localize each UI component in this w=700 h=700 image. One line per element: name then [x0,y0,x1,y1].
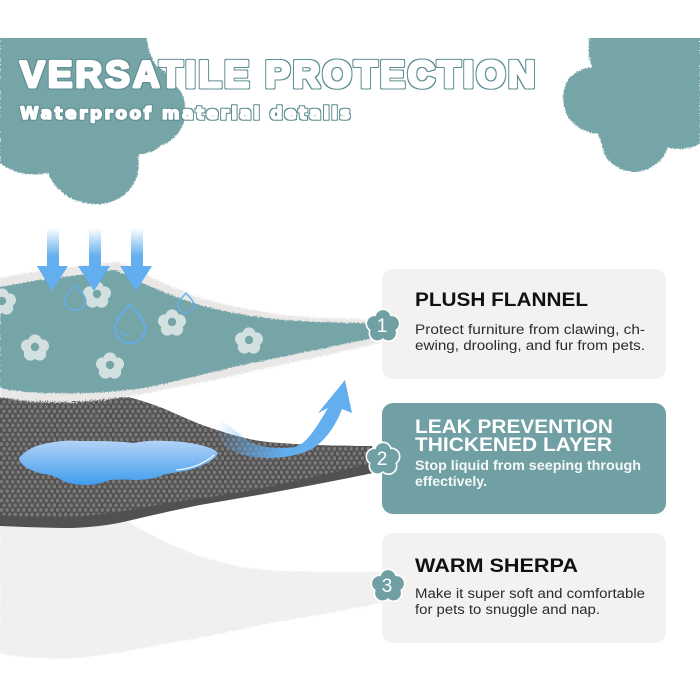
water puddle [19,441,218,485]
description: Protect furniture from clawing, ch- [415,322,645,337]
water drop outlines [65,284,194,343]
badge 3 [370,568,406,602]
heading [415,417,613,456]
description: Stop liquid from seeping through [415,458,641,473]
panel: plush flannel [382,269,666,379]
arrows: water pressing down [37,228,152,291]
title: VERSATILE PROTECTION [20,54,535,95]
badge 2 [366,442,400,475]
badge 1 [366,308,400,342]
description: ewing, drooling, and fur from pets. [415,338,645,353]
heading: THICKENED LAYER [415,435,612,456]
flannel flower prints [0,281,263,379]
heading: WARM SHERPA [415,556,578,577]
teal fabric [0,270,378,393]
background cloud: top left [0,30,185,204]
layer 2: leak prevention layer [0,397,378,528]
panel: warm sherpa [382,533,666,643]
description [415,322,645,353]
panel: leak prevention [382,403,666,514]
badge 3: 3 [382,576,392,597]
description: Make it super soft and comfortable [415,586,645,601]
layer 3: warm sherpa [0,515,384,659]
heading: PLUSH FLANNEL [415,290,588,311]
description: for pets to snuggle and nap. [415,602,600,617]
woven dot texture [0,397,372,517]
subtitle: Waterproof material details [20,104,350,124]
curved arrow: moisture deflected [217,380,352,458]
description [415,458,641,489]
heading: LEAK PREVENTION [415,417,613,438]
layer 1: plush flannel [0,262,380,402]
badge 1: 1 [377,316,387,337]
description [415,586,645,617]
white fringe [0,262,380,402]
badge 2: 2 [377,449,387,470]
background cloud: top right [563,30,700,172]
puddle highlight [176,455,214,470]
description: effectively. [415,474,487,489]
flower centres [0,290,253,369]
dark base band [0,397,378,528]
